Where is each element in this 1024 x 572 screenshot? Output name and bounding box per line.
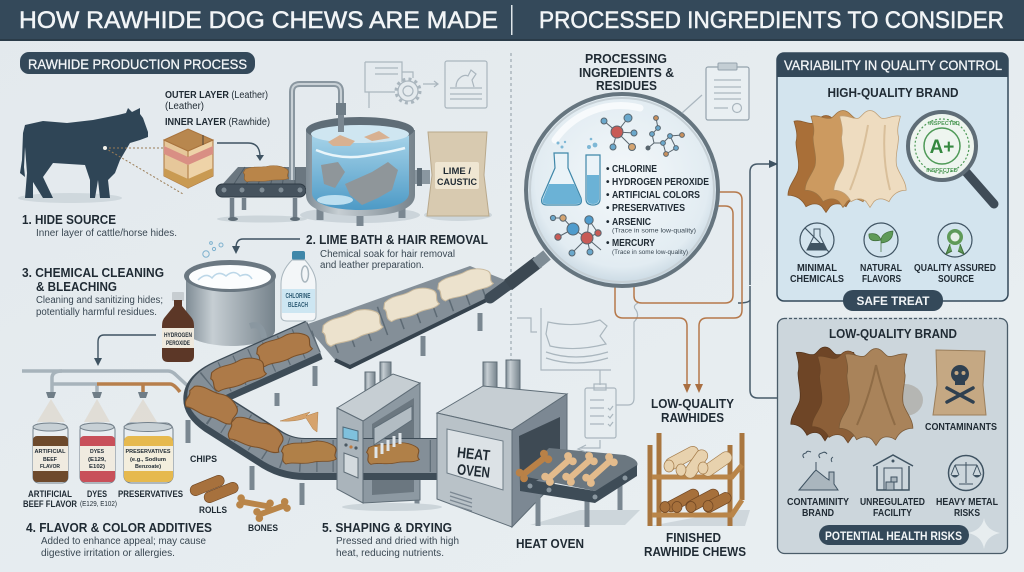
text: hide layer labels: INNER LAYER (Rawhide) xyxy=(165,117,270,128)
step 4: flavor and color additives: 4. FLAVOR & COLOR ADDITIVES xyxy=(26,520,212,535)
step 5: shaping and drying: heat, reducing nutrients. xyxy=(336,548,444,559)
heading: processing ingredients and residues xyxy=(579,51,674,93)
icon: inspection magnifier: INSPECTED xyxy=(928,121,960,127)
ingredient list xyxy=(606,164,709,256)
heading: processing ingredients and residues: PROCESSING xyxy=(585,51,667,66)
small conveyor with hide xyxy=(216,166,310,222)
lime caustic bag: CAUSTIC xyxy=(437,177,477,188)
icon: clipboard report xyxy=(682,63,749,120)
ingredient list: ARSENIC xyxy=(612,217,651,228)
icon: minimal chemicals xyxy=(800,223,834,257)
additive labels xyxy=(23,489,183,510)
jar: preservatives: Benzoate) xyxy=(135,464,161,470)
step 4: flavor and color additives xyxy=(26,520,212,559)
icon labels: high-quality: NATURAL xyxy=(860,263,902,274)
icon: hide cross-section cube xyxy=(164,129,213,188)
icon: faded process schematic xyxy=(365,61,487,108)
step 2: lime bath and hair removal: 2. LIME BATH & HAIR REMOVAL xyxy=(306,232,488,247)
text: hide layer labels: (Leather) xyxy=(165,101,204,112)
label: heat oven: HEAT OVEN xyxy=(516,536,584,551)
icon labels: low-quality: HEAVY METAL xyxy=(936,497,998,508)
step 5: shaping and drying xyxy=(322,520,459,559)
ingredient list: • xyxy=(606,164,610,175)
low-quality hides xyxy=(791,347,923,445)
label: contaminants: CONTAMINANTS xyxy=(925,422,997,433)
jar: dyes xyxy=(80,423,115,483)
icon: unregulated facility xyxy=(873,455,913,490)
ingredient list: ARTIFICIAL COLORS xyxy=(612,190,700,201)
icon: quality assured source xyxy=(938,223,972,257)
icon labels: high-quality xyxy=(790,263,996,285)
step 3: chemical cleaning and bleaching: 3. CHEMICAL CLEANING xyxy=(22,265,164,280)
label: rolls: ROLLS xyxy=(199,505,227,516)
arrow: bleaching to additives xyxy=(94,335,156,366)
pill: potential health risks: POTENTIAL HEALTH RISKS xyxy=(825,529,962,543)
step 3: chemical cleaning and bleaching: Cleaning and sanitizing hides; xyxy=(36,295,163,306)
step 5: shaping and drying: 5. SHAPING & DRYING xyxy=(322,520,452,535)
ingredient list: MERCURY xyxy=(612,238,655,249)
icon labels: low-quality: UNREGULATED xyxy=(860,497,925,508)
jar: dyes: DYES xyxy=(90,449,104,455)
icon: faded bones and checklist schematic xyxy=(517,303,638,452)
header band xyxy=(0,0,1024,41)
jar: preservatives: (e.g., Sodium xyxy=(130,457,166,463)
section pill: rawhide production process: RAWHIDE PRODUCTION PROCESS xyxy=(28,56,247,72)
main conveyor belt with hides xyxy=(182,265,505,505)
rolled chews xyxy=(188,474,240,504)
label: finished rawhide chews xyxy=(644,530,746,559)
label: finished rawhide chews: FINISHED xyxy=(666,530,721,545)
step 4: flavor and color additives: digestive irritation or allergies. xyxy=(41,548,175,559)
ingredient list: HYDROGEN PEROXIDE xyxy=(612,177,709,188)
heading: high-quality brand: HIGH-QUALITY BRAND xyxy=(828,85,958,100)
icon labels: high-quality: QUALITY ASSURED xyxy=(914,263,996,274)
additive labels: DYES xyxy=(87,489,107,500)
step 3: chemical cleaning and bleaching xyxy=(22,265,164,318)
icon: molecule ring xyxy=(646,116,684,156)
hydrogen peroxide bottle xyxy=(162,292,194,362)
ingredient list: PRESERVATIVES xyxy=(612,203,685,214)
icon: heavy metal scales xyxy=(948,456,984,490)
icon labels: high-quality: SOURCE xyxy=(938,274,974,285)
ingredient list: CHLORINE xyxy=(612,164,657,175)
label: low-quality rawhides xyxy=(651,396,734,425)
heading: processing ingredients and residues: INGREDIENTS & xyxy=(579,65,674,80)
step 3: chemical cleaning and bleaching: & BLEACHING xyxy=(36,279,117,294)
step 1: hide source: 1. HIDE SOURCE xyxy=(22,212,116,227)
icon labels: high-quality: MINIMAL xyxy=(797,263,837,274)
magnifying glass handle xyxy=(490,255,547,298)
additive labels: BEEF FLAVOR xyxy=(23,499,77,510)
step 2: lime bath and hair removal: Chemical soak for hair removal xyxy=(320,249,455,260)
icon: molecule bottom xyxy=(550,215,601,256)
jar: dyes: (E129, xyxy=(88,457,107,463)
icon: molecule top xyxy=(601,114,637,150)
panel: low-quality brand xyxy=(778,318,1008,554)
icon labels: low-quality: FACILITY xyxy=(873,508,912,519)
jar: artificial beef flavor: BEEF xyxy=(43,457,58,463)
panel header text: VARIABILITY IN QUALITY CONTROL xyxy=(784,58,1002,73)
icon: flask xyxy=(542,141,581,205)
chlorine bleach bottle: BLEACH xyxy=(288,302,308,309)
additive labels: PRESERVATIVES xyxy=(118,489,183,500)
hydrogen peroxide bottle: PEROXIDE xyxy=(166,340,190,347)
panel: variability in quality control xyxy=(777,53,1008,301)
icon: scrap hide arrow xyxy=(280,412,318,432)
arrow: lime bath to bleaching xyxy=(232,239,300,254)
lime caustic bag: LIME / xyxy=(443,166,471,177)
ingredient list: (Trace in some low-quality) xyxy=(612,228,696,234)
heat oven machine: OVEN xyxy=(456,461,491,482)
additive labels: (E129, E102) xyxy=(80,499,117,508)
label: low-quality rawhides: LOW-QUALITY xyxy=(651,396,734,411)
icon: test tube xyxy=(586,138,600,205)
pill: potential health risks xyxy=(819,525,969,545)
icon labels: low-quality: CONTAMINITY xyxy=(787,497,849,508)
ingredient list: • xyxy=(606,203,610,214)
press machine xyxy=(337,362,442,511)
icon: cow silhouette xyxy=(18,108,183,203)
additive pipes and sprayers xyxy=(22,371,190,422)
jar: dyes: E102) xyxy=(89,464,105,470)
pill: safe treat xyxy=(843,290,943,311)
ingredient list: • xyxy=(606,177,610,188)
section pill: rawhide production process xyxy=(20,52,255,74)
icon labels: low-quality: RISKS xyxy=(954,508,980,519)
shelf of finished chews xyxy=(650,433,750,526)
label: low-quality rawhides: RAWHIDES xyxy=(661,410,724,425)
lime caustic bag xyxy=(424,132,492,221)
chlorine bleach bottle xyxy=(281,251,316,321)
additive labels: ARTIFICIAL xyxy=(28,489,72,500)
jar: artificial beef flavor: FLAVOR xyxy=(40,464,60,470)
icon: inspection magnifier: INSPECTED xyxy=(926,168,958,174)
icon labels: high-quality: CHEMICALS xyxy=(790,274,844,285)
hydrogen peroxide bottle: HYDROGEN xyxy=(164,332,192,339)
exit conveyor with bones xyxy=(514,448,640,527)
title: how rawhide dog chews are made: HOW RAWHIDE DOG CHEWS ARE MADE xyxy=(19,7,498,34)
magnifier lens: processing ingredients xyxy=(526,94,718,286)
step 1: hide source xyxy=(22,212,177,239)
icon: natural flavors xyxy=(864,223,898,257)
arrows: quality control routing xyxy=(738,160,794,402)
icon: contaminity factory xyxy=(799,451,838,490)
step 4: flavor and color additives: Added to enhance appeal; may cause xyxy=(41,536,206,547)
title: processed ingredients to consider: PROCESSED INGREDIENTS TO CONSIDER xyxy=(539,7,1004,34)
step 2: lime bath and hair removal: and leather preparation. xyxy=(320,260,424,271)
heading: low-quality brand: LOW-QUALITY BRAND xyxy=(829,326,957,341)
bone chews xyxy=(236,494,292,523)
jar: preservatives xyxy=(124,422,173,483)
label: chips: CHIPS xyxy=(190,454,217,465)
label: bones: BONES xyxy=(248,523,278,534)
icon labels: low-quality: BRAND xyxy=(802,508,834,519)
icon labels: low-quality xyxy=(787,497,998,519)
jar: artificial beef flavor: ARTIFICIAL xyxy=(34,449,66,455)
label: finished rawhide chews: RAWHIDE CHEWS xyxy=(644,544,746,559)
step 2: lime bath and hair removal xyxy=(306,232,488,271)
heat oven machine xyxy=(437,360,567,527)
bleaching vat xyxy=(184,242,276,346)
jar: preservatives: PRESERVATIVES xyxy=(126,449,171,455)
heat oven machine: HEAT xyxy=(456,444,491,465)
arrow: cube to conveyor xyxy=(217,143,264,161)
step 1: hide source: Inner layer of cattle/horse hides. xyxy=(36,228,177,239)
ingredient list: • xyxy=(606,238,610,249)
lime bath tank xyxy=(292,84,430,226)
ingredient list: • xyxy=(606,217,610,228)
high-quality hides xyxy=(788,110,906,212)
icon: inspection magnifier xyxy=(908,112,994,204)
text: hide layer labels: OUTER LAYER (Leather) xyxy=(165,90,268,101)
step 5: shaping and drying: Pressed and dried with high xyxy=(336,536,459,547)
arrows: residues into low-quality rawhides xyxy=(615,192,742,393)
icon: contaminants bag xyxy=(933,350,986,415)
ingredient list: (Trace in some low-quality) xyxy=(612,249,688,256)
pill: safe treat: SAFE TREAT xyxy=(856,294,930,308)
ingredient list: • xyxy=(606,190,610,201)
step 3: chemical cleaning and bleaching: potentially harmful residues. xyxy=(36,307,157,318)
section divider xyxy=(510,53,512,372)
icon: inspection magnifier: A+ xyxy=(930,137,954,158)
heading: processing ingredients and residues: RESIDUES xyxy=(596,78,657,93)
text: hide layer labels xyxy=(165,90,270,128)
jar: artificial beef flavor xyxy=(33,423,68,483)
icon labels: high-quality: FLAVORS xyxy=(862,274,901,285)
icon: sparkle xyxy=(968,518,1000,549)
chlorine bleach bottle: CHLORINE xyxy=(286,293,311,300)
